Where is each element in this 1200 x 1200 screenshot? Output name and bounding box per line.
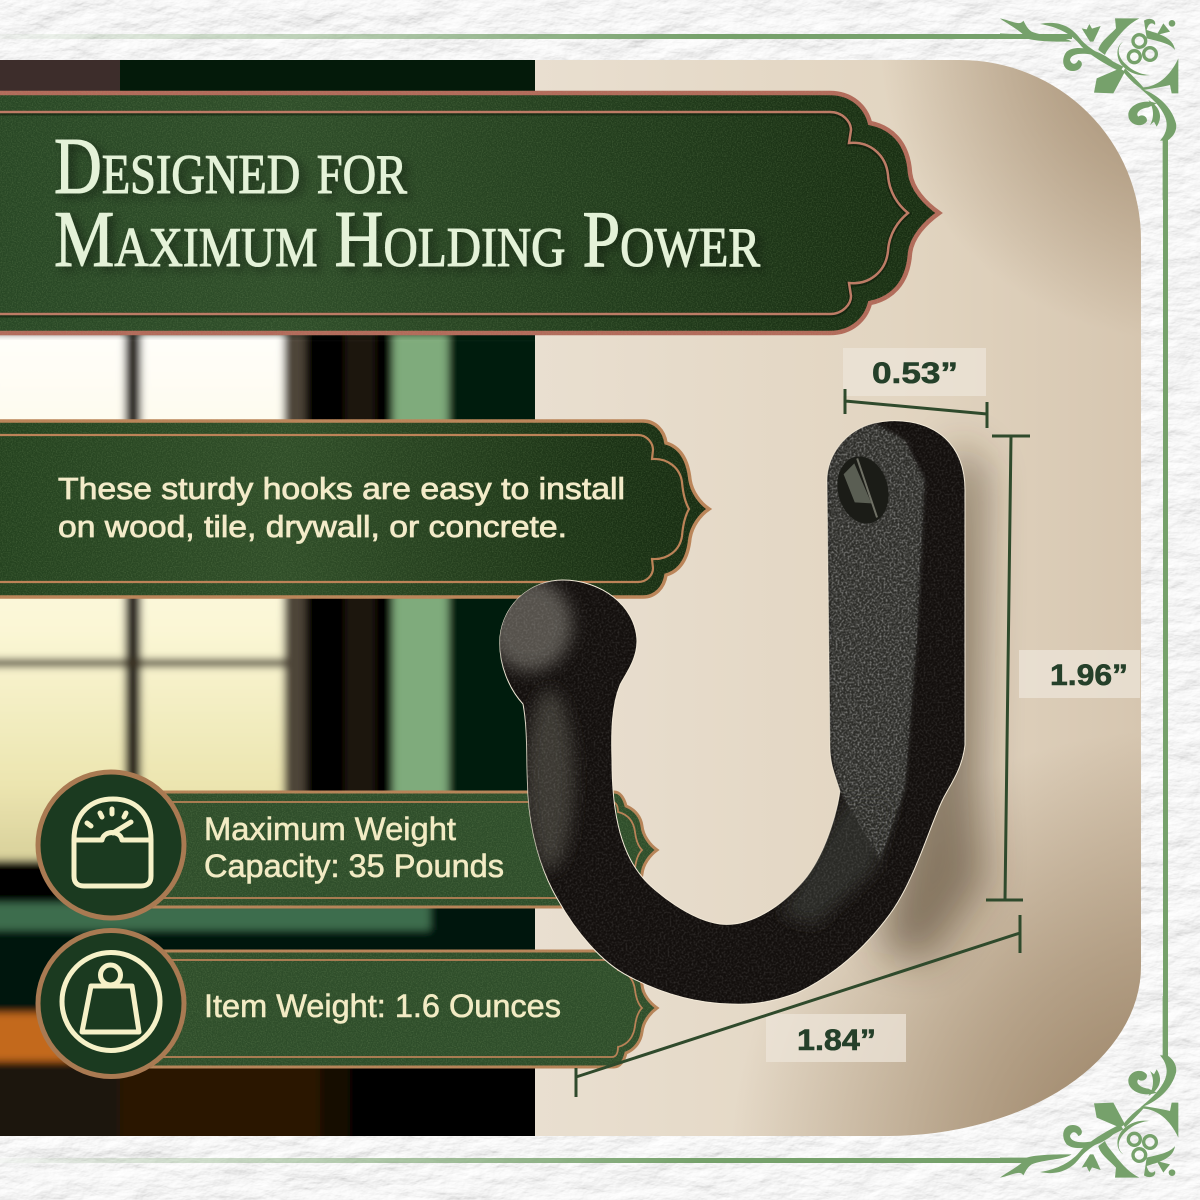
ornament: top right corner (1000, 18, 1178, 200)
maximum weight text: Capacity: 35 Pounds (204, 848, 504, 884)
beige wall (535, 60, 1145, 1136)
panel: maximum weight banner (100, 792, 657, 907)
maximum weight text (204, 811, 504, 884)
hook (488, 415, 970, 1010)
icon: weight badge (38, 930, 184, 1076)
icon: scale gauge badge (38, 772, 184, 918)
dimension: width 0.53 (843, 348, 987, 428)
description text: These sturdy hooks are easy to install (58, 471, 625, 506)
blurred window photo (0, 60, 545, 1146)
dimension: depth 1.84 (576, 915, 1020, 1097)
title text: Designed for (54, 123, 408, 211)
title text: Maximum Holding Power (54, 196, 761, 284)
dimension: width 0.53: 0.53” (872, 357, 958, 390)
item weight text: Item Weight: 1.6 Ounces (204, 988, 561, 1024)
panel: title banner (0, 93, 939, 333)
maximum weight text: Maximum Weight (204, 811, 456, 847)
screw (837, 456, 888, 524)
panel: description banner (0, 421, 709, 597)
dimension: height 1.96 (986, 436, 1140, 900)
dimension: height 1.96: 1.96” (1050, 659, 1128, 692)
dimension: depth 1.84: 1.84” (797, 1024, 876, 1057)
title text (54, 123, 761, 284)
ornament: bottom right corner (1000, 996, 1178, 1178)
panel: item weight banner (100, 951, 657, 1067)
description text (58, 471, 625, 544)
description text: on wood, tile, drywall, or concrete. (58, 509, 567, 544)
hook shadow on wall (880, 440, 985, 960)
